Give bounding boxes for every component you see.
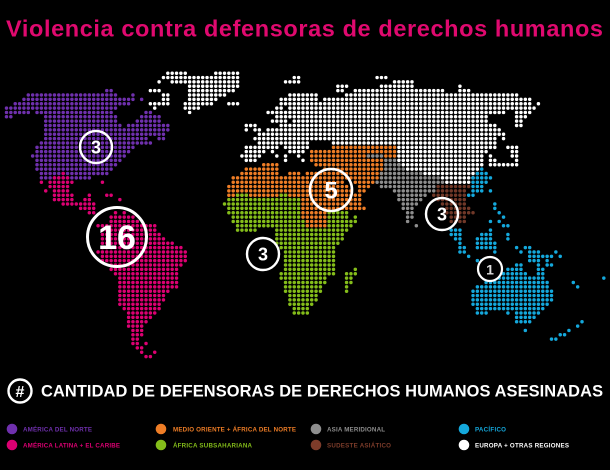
legend item: Sub-Saharan Africa: ÁFRICA SUBSAHARIANA: [173, 442, 253, 450]
legend: [7, 424, 569, 450]
legend item: Southeast Asia: SUDESTE ASIÁTICO: [327, 442, 391, 450]
legend item: Southeast Asia: [311, 440, 391, 450]
region: South Asia (gray): [368, 156, 443, 226]
legend item: North America: AMÉRICA DEL NORTE: [23, 426, 92, 434]
key heading: CANTIDAD DE DEFENSORAS DE DERECHOS HUMANOS ASESINADAS: [41, 383, 603, 401]
legend item: Pacific: PACÍFICO: [475, 426, 506, 434]
legend item: Europe and others: EUROPA + OTRAS REGIONES: [475, 442, 569, 450]
icon: hash in circle: [8, 380, 32, 402]
map: dotted world regions: [6, 73, 604, 357]
region: Southeast Asia (brown): [434, 187, 473, 221]
legend item: Pacific: [459, 424, 506, 434]
count circle: Sub-Saharan Africa 3: 3: [258, 244, 268, 264]
legend item: Middle East: [156, 424, 296, 434]
count circle: Pacific 1: 1: [486, 262, 494, 278]
legend item: South Asia: ASIA MERIDIONAL: [327, 426, 385, 434]
title: Violencia contra defensoras de derechos humanos: [6, 16, 603, 42]
count circle: North America 3: [80, 131, 112, 163]
icon: hash in circle: #: [16, 384, 25, 401]
legend item: Middle East: MEDIO ORIENTE + ÁFRICA DEL NORTE: [173, 426, 296, 434]
region: Europe and other regions (white): [150, 73, 539, 182]
count circle: Pacific 1: [478, 257, 502, 281]
count circle: Middle East 5: [310, 169, 352, 211]
legend item: Europe and others: [459, 440, 569, 450]
region: Middle East and North Africa (orange): [229, 147, 395, 226]
region: Latin America and the Caribbean (pink): [41, 173, 186, 357]
count circle: Southeast Asia 3: 3: [437, 204, 447, 224]
legend item: Latin America: [7, 440, 120, 450]
region: Pacific (blue): [451, 169, 604, 339]
legend item: Latin America: AMÉRICA LATINA + EL CARIBE: [23, 442, 120, 450]
legend item: South Asia: [311, 424, 385, 434]
count circle: North America 3: 3: [91, 138, 101, 158]
count circle: Latin America 16: [88, 208, 146, 266]
region: Sub-Saharan Africa (green): [224, 195, 356, 313]
region: North America (purple): [6, 91, 168, 178]
legend item: North America: [7, 424, 92, 434]
count circle: Middle East 5: 5: [324, 178, 338, 204]
count circle: Sub-Saharan Africa 3: [247, 238, 279, 270]
count circle: Southeast Asia 3: [426, 198, 458, 230]
legend item: Sub-Saharan Africa: [156, 440, 253, 450]
count circle: Latin America 16: 16: [98, 219, 136, 257]
